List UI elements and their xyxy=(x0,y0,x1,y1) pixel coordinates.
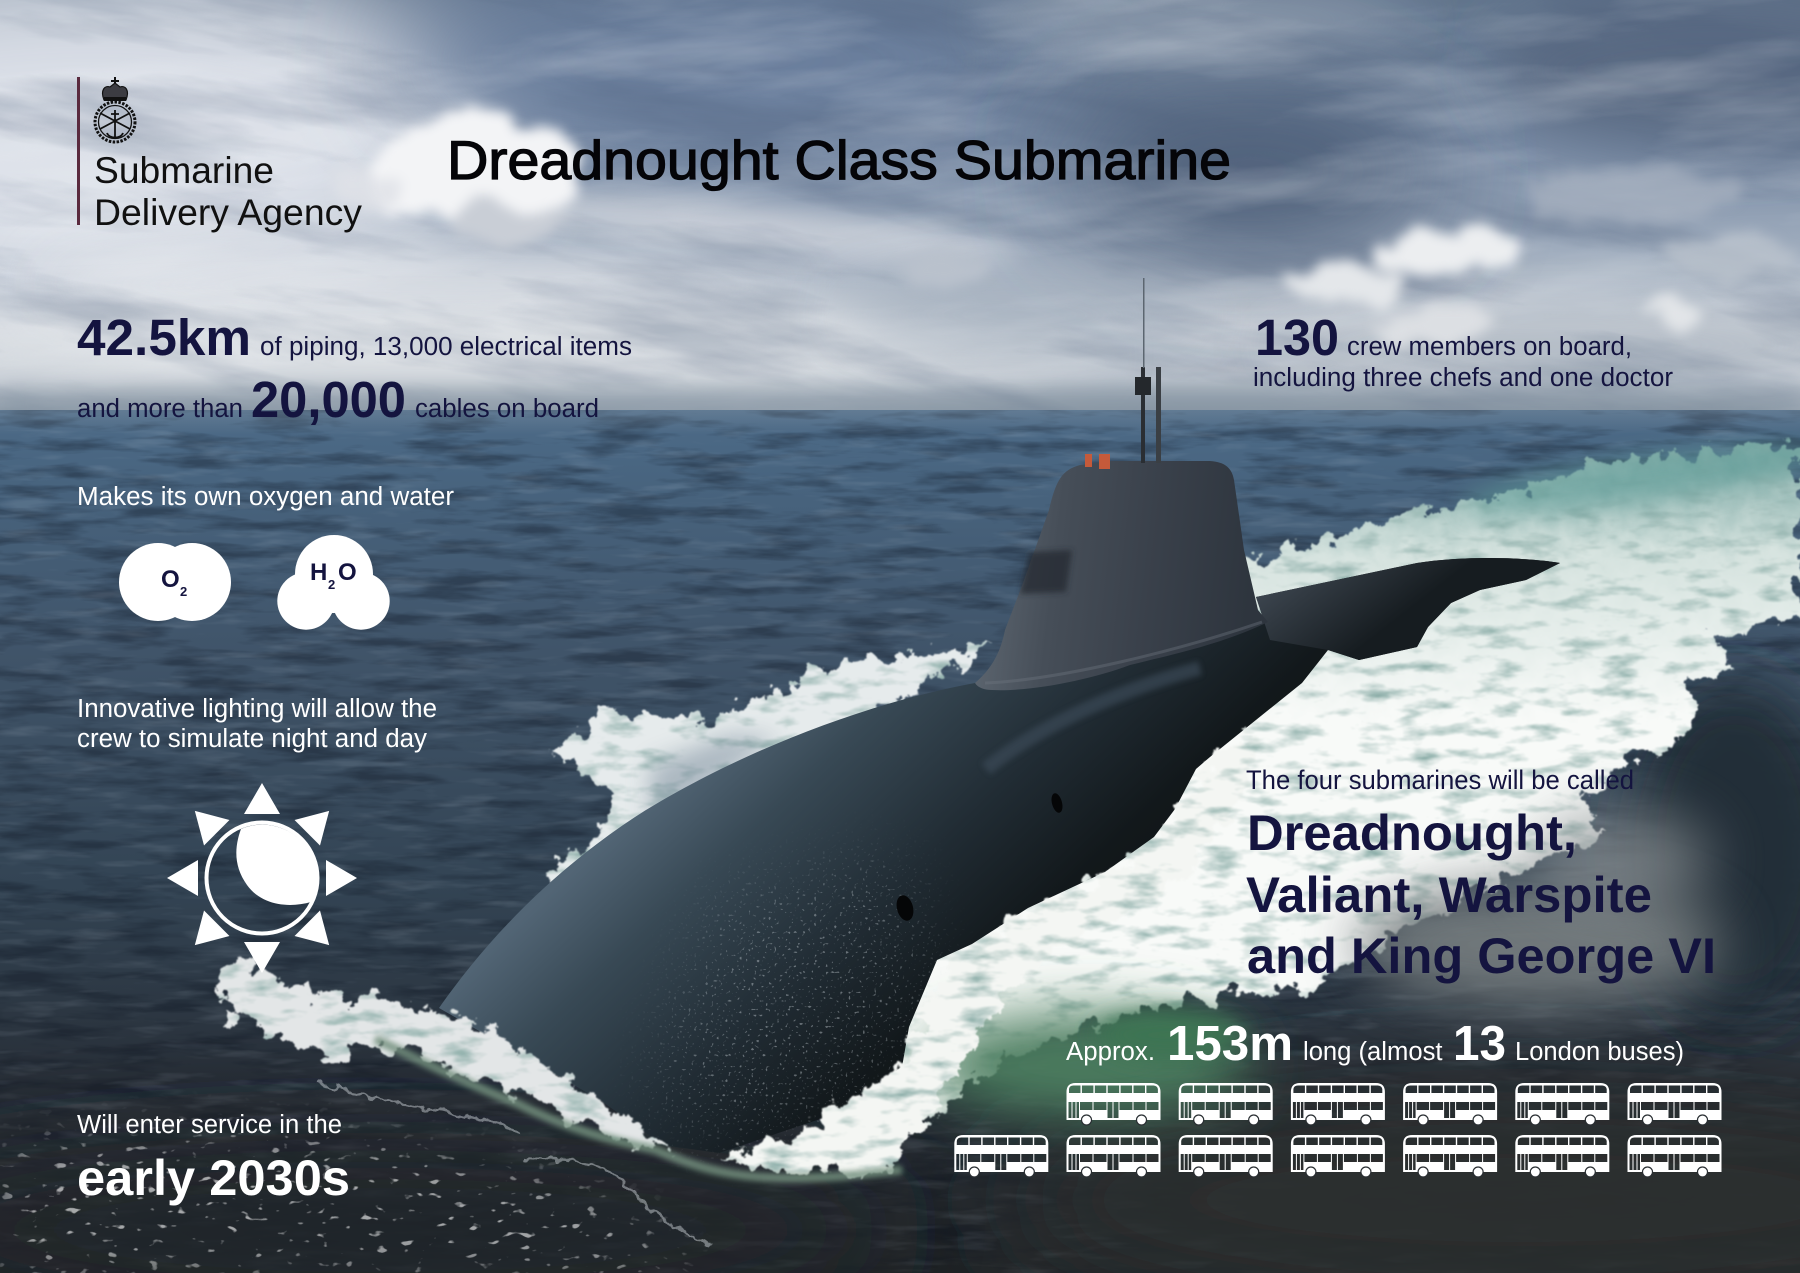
crew on sail xyxy=(1085,454,1110,469)
icons: 13 London buses xyxy=(954,1083,1722,1177)
background: bow foam xyxy=(218,956,902,1247)
stat: crew: crew members on board, xyxy=(1347,333,1632,361)
text: innovative lighting: crew to simulate night and day xyxy=(77,725,427,753)
icon: H2O cloud xyxy=(277,535,390,630)
stat: piping and cables: cables on board xyxy=(415,395,599,423)
stat: piping and cables: 42.5km xyxy=(77,309,251,366)
stat: piping and cables: 20,000 xyxy=(251,371,406,428)
text: makes own oxygen and water: Makes its own oxygen and water xyxy=(77,483,455,511)
stat: piping and cables: of piping, 13,000 electrical items xyxy=(260,333,632,361)
submarine hull xyxy=(439,558,1560,1153)
hull vent openings xyxy=(894,792,1064,923)
hull sea-spray speckles xyxy=(650,860,930,1140)
stat: piping and cables xyxy=(77,309,632,428)
text: submarine names: Dreadnought, xyxy=(1247,805,1577,861)
text: service entry date xyxy=(77,1111,350,1206)
stat: crew: 130 xyxy=(1255,309,1339,366)
logo text: Submarine xyxy=(94,150,274,191)
stat: length xyxy=(1066,1017,1684,1071)
icon: O2 cloud: O xyxy=(161,566,180,593)
background: left spray beside the hull xyxy=(537,645,993,930)
icon: O2 cloud: 2 xyxy=(180,584,187,599)
stat: length: Approx. xyxy=(1066,1038,1155,1066)
logo rule xyxy=(77,77,80,225)
background: clouds xyxy=(330,112,1800,339)
stat: length: London buses) xyxy=(1515,1038,1684,1066)
text: submarine names xyxy=(1246,765,1716,984)
title: Dreadnought Class Submarine xyxy=(447,129,1231,191)
icon: sun and moon xyxy=(167,783,357,973)
stat: crew: including three chefs and one doctor xyxy=(1253,364,1674,392)
icon: H2O cloud: 2 xyxy=(328,577,335,592)
icon: H2O cloud: O xyxy=(338,559,357,586)
sail shaded band xyxy=(1020,550,1072,594)
background: wave crest along hull xyxy=(719,730,1260,1172)
icon: Ministry of Defence crest xyxy=(95,77,135,142)
icon: O2 cloud xyxy=(119,543,231,621)
hull highlight xyxy=(986,668,1200,769)
logo text xyxy=(94,150,362,233)
stat: piping and cables: and more than xyxy=(77,395,243,423)
masts xyxy=(1135,278,1161,463)
stat: crew xyxy=(1253,309,1674,392)
background: sky xyxy=(0,0,1800,410)
text: submarine names: and King George VI xyxy=(1247,928,1716,984)
text: innovative lighting: Innovative lighting will allow the xyxy=(77,695,437,723)
logo: Submarine Delivery Agency xyxy=(77,77,362,233)
icon: H2O cloud: H xyxy=(310,559,327,586)
sail xyxy=(975,461,1268,690)
text: service entry date: early 2030s xyxy=(77,1150,350,1206)
text: submarine names: Valiant, Warspite xyxy=(1246,867,1652,923)
background: white wake behind the submarine xyxy=(860,433,1800,1180)
background: sea xyxy=(0,410,1800,1273)
logo text: Delivery Agency xyxy=(94,192,362,233)
sail hull-base fillet xyxy=(985,622,1262,683)
submarine xyxy=(439,278,1560,1153)
text: submarine names: The four submarines will be called xyxy=(1246,765,1634,795)
background: green water under the bow wave xyxy=(925,1011,1255,1117)
text: service entry date: Will enter service in the xyxy=(77,1111,342,1139)
stat: length: long (almost xyxy=(1303,1038,1442,1066)
background: grey haze behind ship names xyxy=(1355,810,1725,1007)
stern deck xyxy=(1256,558,1560,660)
stat: length: 153m xyxy=(1167,1017,1293,1071)
stat: length: 13 xyxy=(1453,1017,1506,1071)
text: innovative lighting xyxy=(77,695,437,753)
